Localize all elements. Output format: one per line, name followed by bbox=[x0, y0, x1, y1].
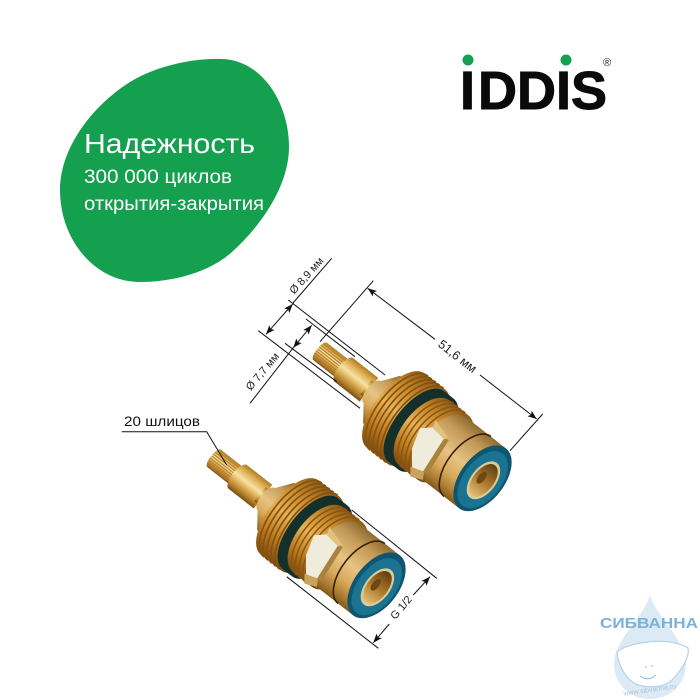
green blob bbox=[60, 59, 289, 282]
label: 51.6 mm: 51,6 мм bbox=[435, 337, 479, 376]
panel: green reliability badge bbox=[60, 59, 289, 282]
callout: 20 splines: 20 шлицов bbox=[124, 414, 200, 429]
text: open-close: открытия-закрытия bbox=[84, 194, 264, 215]
callout: 20 splines bbox=[122, 414, 227, 465]
dimension: length 51.6 mm bbox=[320, 281, 543, 451]
label: 8.9 mm: Ø 8,9 мм bbox=[287, 255, 326, 297]
dimension: diameter 7.7 mm bbox=[244, 319, 355, 403]
text: cycle count: 300 000 циклов bbox=[84, 167, 232, 188]
upper cartridge bbox=[288, 312, 529, 529]
registered mark: ® bbox=[603, 57, 611, 69]
dimension: G 1/2 thread bbox=[287, 510, 437, 648]
dimension: diameter 8.9 mm bbox=[258, 255, 385, 408]
heading: reliability: Надежность bbox=[84, 128, 255, 159]
watermark name: СИБВАННА bbox=[600, 616, 699, 632]
label: G 1/2: G 1/2 bbox=[388, 594, 415, 622]
lower cartridge bbox=[182, 419, 423, 636]
logo wordmark: IDDIS bbox=[460, 61, 607, 121]
logo right green dot bbox=[560, 54, 572, 66]
watermark face bbox=[640, 665, 656, 679]
watermark drop bbox=[614, 595, 686, 699]
logo left green dot bbox=[462, 54, 474, 66]
watermark tub bbox=[617, 641, 688, 687]
watermark url: www.sibvanna.ru bbox=[622, 683, 677, 698]
watermark: Sibvanna bbox=[600, 595, 699, 699]
label: 7.7 mm: Ø 7,7 мм bbox=[244, 351, 282, 393]
logo: IDDIS bbox=[460, 54, 611, 121]
